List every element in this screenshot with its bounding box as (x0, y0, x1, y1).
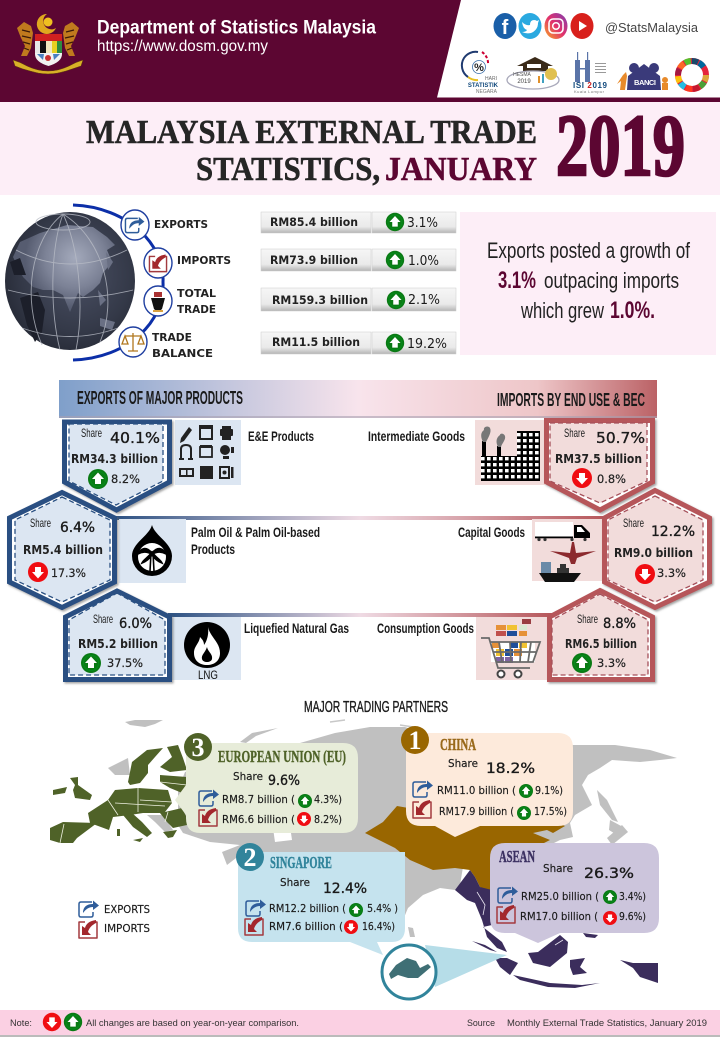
card: singapore: 12.4% (323, 881, 367, 897)
summary text (487, 238, 691, 324)
card: china: RM17.9 billion ( (439, 806, 514, 818)
map: eurasia land (108, 720, 677, 937)
title line 2: STATISTICS, (196, 151, 380, 188)
indicator: exports (121, 210, 456, 240)
title line 2 (196, 151, 537, 188)
header band (0, 0, 720, 102)
globe land (13, 225, 115, 312)
icon: twitter (518, 13, 542, 39)
heading: major trading partners: MAJOR TRADING PARTNERS (304, 699, 448, 716)
indicator: total trade (144, 286, 456, 316)
hexagon: palm oil (10, 492, 114, 608)
card: asean: 9.6%) (619, 911, 646, 923)
card: asean: 3.4%) (619, 891, 646, 903)
value: imports: RM73.9 billion (270, 253, 358, 267)
card: european union: Share (233, 771, 263, 783)
hexagon: intermediate goods: 50.7% (596, 429, 645, 447)
card: asean: RM17.0 billion ( (520, 911, 598, 923)
hexagon: LNG: 37.5% (107, 656, 143, 670)
hexagon: E&E: Share (81, 426, 102, 440)
change: trade balance: 19.2% (407, 337, 447, 352)
label: capital goods: Capital Goods (458, 524, 525, 540)
card: asean (490, 843, 659, 943)
map: asean (455, 870, 658, 988)
summary text: outpacing imports (544, 268, 679, 293)
change: exports: 3.1% (407, 216, 438, 231)
footer (0, 1010, 720, 1037)
logo: banci: BANCI (634, 78, 656, 87)
logo: hari statistik negara: STATISTIK (468, 83, 499, 89)
hexagon: E&E (64, 422, 170, 510)
heading: department: Department of Statistics Malaysia (97, 18, 376, 38)
label: LNG: Liquefied Natural Gas (244, 620, 349, 636)
hexagon: capital goods: Share (623, 516, 644, 530)
map: europe borders (60, 782, 187, 843)
logo: hari statistik negara: HARI (485, 76, 497, 82)
card: china: Share (448, 758, 478, 770)
map: caspian sea (273, 826, 292, 842)
icon panel: LNG: LNG (198, 668, 218, 682)
map legend: IMPORTS (104, 923, 150, 935)
eu heading: EUROPEAN UNION (EU) (218, 747, 346, 766)
globe (5, 212, 135, 350)
value: trade balance: RM11.5 billion (272, 335, 360, 349)
card: european union (175, 733, 358, 833)
label: intermediate goods: Intermediate Goods (368, 428, 465, 444)
icon panel: E&E (175, 420, 241, 485)
website url: https://www.dosm.gov.my (97, 38, 268, 55)
map: russia coast highlights (330, 720, 420, 728)
logo: hesma (507, 57, 559, 89)
hexagon: intermediate goods: Share (564, 426, 585, 440)
panel: summary (460, 212, 716, 355)
card: singapore: RM12.2 billion ( (269, 903, 346, 915)
white social panel (437, 0, 720, 98)
hexagon: LNG: 6.0% (119, 616, 152, 632)
source text: Monthly External Trade Statistics, January 2019 (507, 1018, 707, 1029)
connector: row 3 (168, 613, 552, 617)
summary text: 1.0%. (610, 297, 655, 324)
map: china (365, 806, 565, 892)
rank badge 3: 3 (192, 733, 204, 762)
card: singapore: RM7.6 billion ( (269, 921, 343, 933)
change: total trade (372, 288, 456, 311)
change: total trade: 2.1% (408, 293, 440, 308)
hexagon: consumption goods: 8.8% (603, 616, 636, 632)
logo: isi 2019: ISI 2019 (573, 81, 608, 90)
label: trade balance (152, 331, 213, 360)
china heading: CHINA (440, 735, 476, 754)
logo: hari statistik negara (462, 52, 499, 95)
hexagon: capital goods: 3.3% (657, 566, 686, 580)
label: consumption goods: Consumption Goods (377, 620, 474, 636)
hexagon: intermediate goods: 0.8% (597, 472, 626, 486)
hexagon: intermediate goods (546, 420, 652, 510)
indicator: imports (144, 248, 456, 278)
hexagon: palm oil: 17.3% (51, 566, 86, 580)
rank badge 3 (184, 733, 212, 762)
rank badge 2: 2 (244, 843, 256, 872)
hexagon: LNG (66, 591, 170, 680)
label: palm oil: Palm Oil & Palm Oil-based (191, 524, 320, 540)
icon: youtube (570, 13, 594, 39)
value: exports (261, 212, 371, 233)
card: european union: 9.6% (268, 773, 300, 789)
hexagon: LNG: Share (93, 612, 113, 626)
card: china (401, 726, 573, 837)
icon panel: shopping cart (476, 617, 547, 680)
value: imports (261, 249, 371, 271)
title band (0, 98, 720, 195)
map: asean borders (477, 892, 563, 945)
icon: scales (119, 327, 147, 357)
hexagon: LNG: RM5.2 billion (78, 637, 158, 651)
label: palm oil: Products (191, 541, 235, 557)
change: imports (372, 249, 456, 271)
logo: isi 2019 (573, 52, 608, 94)
card: european union: RM8.7 billion ( (222, 794, 295, 806)
hexagon: palm oil: 6.4% (60, 520, 95, 536)
icon: imports (144, 248, 172, 278)
card: china: 18.2% (486, 761, 535, 777)
card: singapore (236, 843, 405, 955)
card: singapore: 16.4%) (362, 921, 395, 933)
map legend (79, 900, 150, 938)
value: total trade: RM159.3 billion (272, 293, 368, 307)
hexagon: E&E: 8.2% (111, 472, 140, 486)
logo: hari statistik negara: % (474, 62, 484, 74)
map: europe highlighted (50, 745, 187, 843)
card: china: RM11.0 billion ( (437, 785, 516, 797)
title line 1: MALAYSIA EXTERNAL TRADE (86, 114, 537, 151)
note text: All changes are based on year-on-year comparison. (86, 1018, 299, 1029)
label: palm oil (191, 524, 320, 557)
value: trade balance (261, 332, 371, 354)
label: imports: IMPORTS (177, 254, 231, 267)
callout: singapore zoom wedge (425, 945, 507, 987)
value: exports: RM85.4 billion (270, 215, 358, 229)
change: imports: 1.0% (408, 254, 439, 269)
icon panel: LNG (172, 617, 241, 682)
logo: hesma: 2019 (517, 79, 531, 85)
map legend: EXPORTS (104, 904, 150, 916)
change: exports (372, 212, 456, 233)
asean heading: ASEAN (499, 847, 535, 866)
icon: instagram (544, 13, 568, 39)
title line 2: JANUARY (385, 151, 537, 188)
label: E&E products: E&E Products (248, 428, 314, 444)
hexagon: palm oil: Share (30, 516, 51, 530)
note icons (43, 1013, 82, 1031)
rank badge 1 (401, 726, 429, 755)
value: total trade (261, 288, 371, 311)
globe dark land (10, 258, 45, 342)
hexagon: capital goods: RM9.0 billion (614, 546, 693, 560)
logo: banci (617, 63, 668, 90)
logo: hari statistik negara: NEGARA (476, 89, 498, 95)
rank badge 1: 1 (408, 726, 422, 755)
card: singapore: Share (280, 877, 310, 889)
card: european union: RM6.6 billion ( (222, 814, 295, 826)
card: asean: RM25.0 billion ( (521, 891, 599, 903)
card: european union: 4.3%) (314, 794, 342, 806)
icon: exports (121, 210, 149, 240)
logo: isi 2019: Kuala Lumpur (574, 89, 605, 94)
heading: exports of major products: EXPORTS OF MAJOR PRODUCTS (77, 388, 243, 408)
connector: row 2 (112, 516, 607, 520)
card: singapore: 5.4% ) (367, 903, 398, 915)
hexagon: consumption goods: RM6.5 billion (565, 637, 637, 651)
icon panel: capital goods (532, 519, 603, 582)
label: trade balance: TRADE (152, 331, 192, 344)
rank badge 2 (236, 843, 264, 872)
hexagon: E&E: 40.1% (110, 429, 160, 447)
card: asean: Share (543, 863, 573, 875)
label: total trade: TOTAL (177, 287, 216, 300)
hexagon: consumption goods: Share (577, 612, 598, 626)
summary text: which grew (520, 298, 604, 323)
hexagon: palm oil: RM5.4 billion (23, 543, 103, 557)
note label: Note: (10, 1018, 32, 1029)
label: trade balance: BALANCE (152, 347, 213, 360)
card: china: 9.1%) (535, 785, 563, 797)
label: total trade: TRADE (177, 303, 216, 316)
label: exports: EXPORTS (154, 218, 208, 231)
world map (50, 720, 677, 988)
card: asean: 26.3% (584, 866, 634, 882)
singapore heading: SINGAPORE (270, 853, 332, 872)
logo: hesma: HESMA (513, 72, 532, 78)
hexagon: capital goods (604, 490, 710, 608)
arc connector (73, 205, 163, 360)
icon: facebook: f (502, 17, 509, 39)
hexagon: E&E: RM34.3 billion (71, 452, 158, 466)
hexagon: consumption goods (550, 590, 652, 680)
card: european union: 8.2%) (314, 814, 342, 826)
source label: Source (467, 1018, 495, 1029)
hexagon: intermediate goods: RM37.5 billion (555, 452, 642, 466)
icon panel: factory (475, 420, 545, 485)
card: china: 17.5%) (534, 806, 567, 818)
section header band (59, 380, 657, 418)
change: trade balance (372, 332, 456, 354)
hexagon: consumption goods: 3.3% (597, 656, 626, 670)
indicator: trade balance (119, 327, 456, 360)
logo: sdg wheel (678, 61, 706, 89)
social handle: @StatsMalaysia (605, 20, 699, 35)
summary text: 3.1% (498, 267, 536, 294)
icon panel: palm oil (119, 519, 186, 583)
hexagon: capital goods: 12.2% (651, 524, 695, 540)
icon: facebook (494, 13, 516, 39)
icon: ship (144, 286, 172, 316)
icon: coat of arms (13, 14, 83, 74)
label: total trade (177, 287, 216, 316)
icon: singapore inset (382, 945, 436, 999)
